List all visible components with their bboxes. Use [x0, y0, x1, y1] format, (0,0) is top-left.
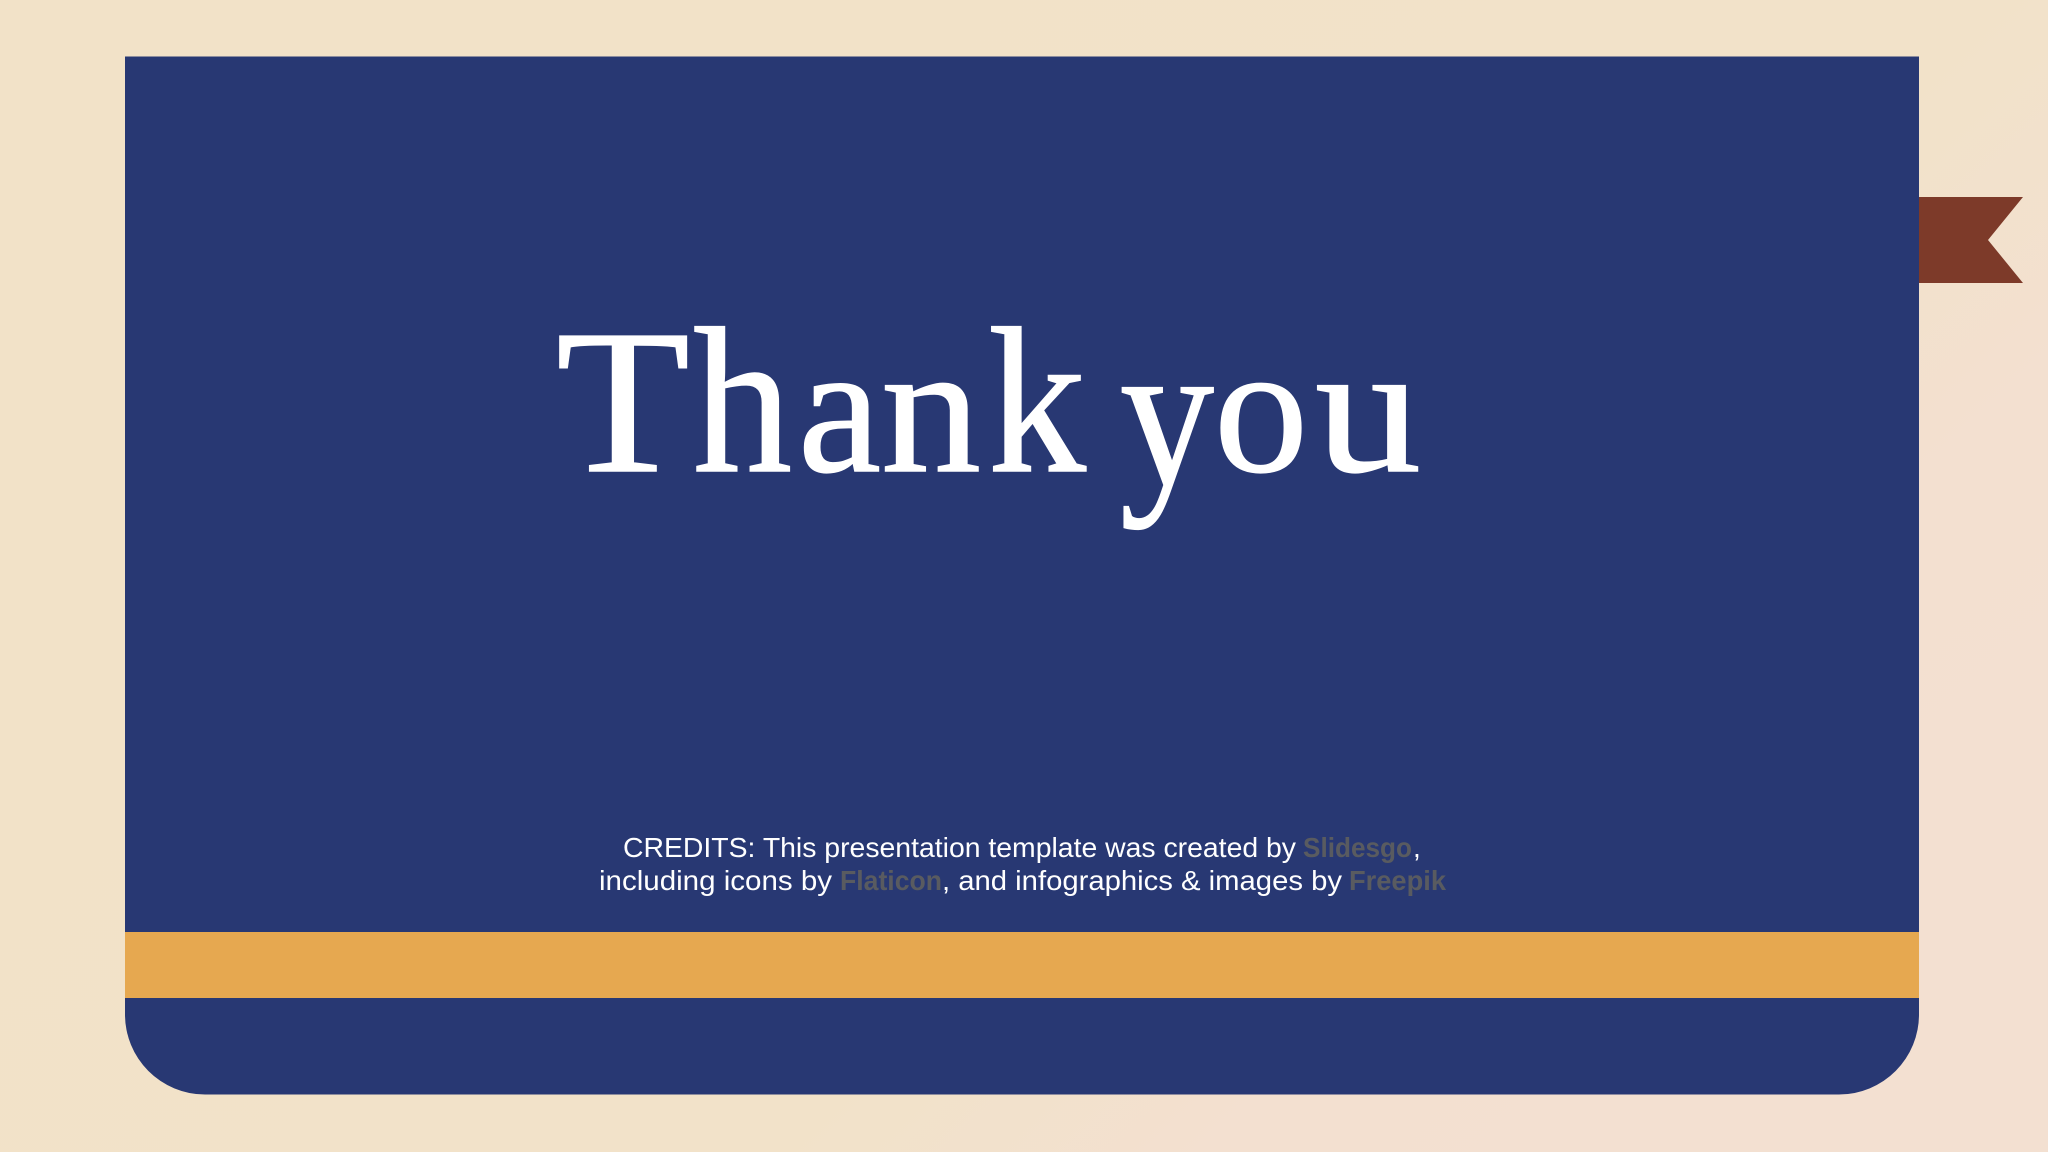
title: a	[798, 306, 881, 512]
credits text: including icons by	[599, 865, 832, 896]
credits text: , and infographics & images by	[942, 865, 1342, 896]
title: y	[1120, 298, 1214, 530]
title: k	[988, 286, 1086, 516]
title: u	[1315, 306, 1421, 512]
credits text: ,	[1413, 832, 1421, 863]
credits text: Slidesgo	[1303, 832, 1412, 863]
ribbon flag	[1918, 197, 2023, 283]
title: T	[556, 287, 690, 516]
title: o	[1214, 306, 1308, 512]
credits text: CREDITS: This presentation template was created by	[623, 832, 1296, 863]
credits text: Flaticon	[840, 865, 942, 896]
panel: navy card	[125, 56, 1919, 1094]
title	[556, 286, 1421, 530]
title: h	[693, 286, 792, 516]
credits text: Freepik	[1349, 865, 1446, 896]
credits text	[599, 832, 1446, 896]
accent band	[125, 932, 1919, 998]
title: n	[881, 306, 981, 512]
